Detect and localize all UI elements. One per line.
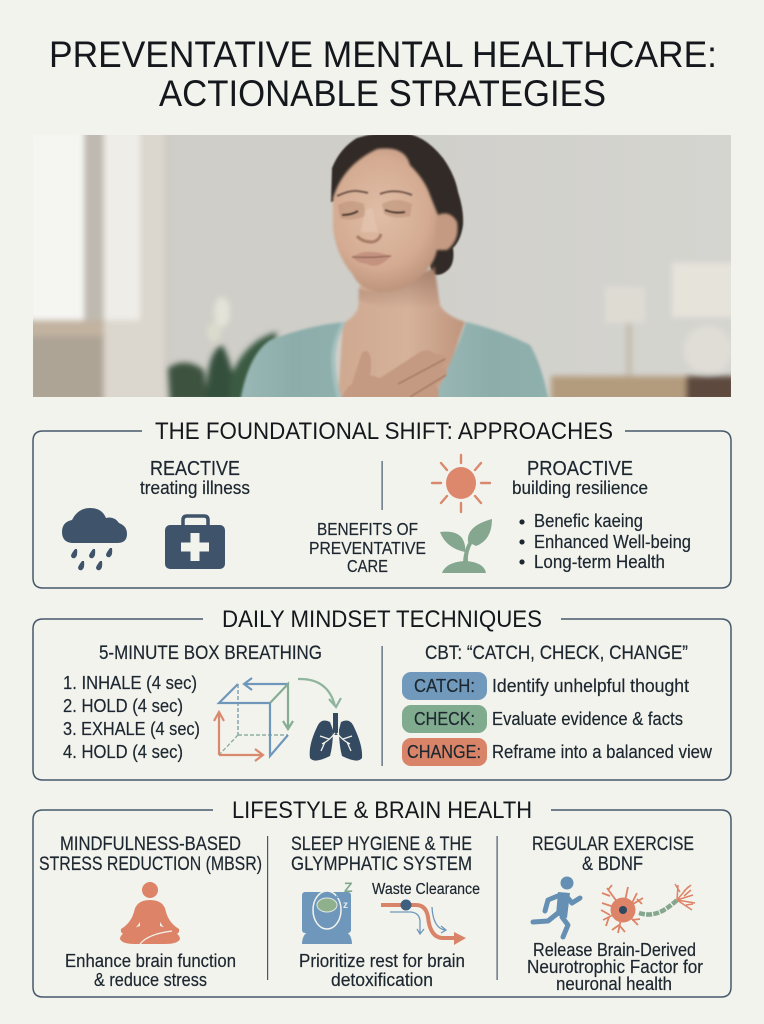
- eyebrows: [337, 191, 412, 196]
- breathing steps: 3. EXHALE (4 sec): [63, 718, 200, 739]
- benefits list: Benefic kaeing: [534, 511, 643, 531]
- heading: MBSR: STRESS REDUCTION (MBSR): [39, 854, 262, 875]
- icon: lungs: [310, 713, 362, 761]
- breathing steps: 1. INHALE (4 sec): [63, 672, 197, 693]
- breathing steps: 2. HOLD (4 sec): [63, 695, 183, 716]
- diagram: waste clearance flow: [381, 900, 466, 945]
- panel: daily mindset techniques: [33, 606, 731, 780]
- icon: sleeping head: [302, 879, 353, 944]
- breathing steps: [63, 672, 200, 762]
- title: ACTIONABLE STRATEGIES: [159, 73, 606, 114]
- MBSR text: Enhance brain function: [65, 951, 236, 971]
- exercise text: [527, 940, 703, 994]
- benefits list: Long-term Health: [534, 552, 665, 572]
- exercise text: Neurotrophic Factor for: [527, 957, 703, 977]
- benefits label: CARE: [347, 556, 388, 576]
- lamps and side table: [551, 263, 736, 402]
- icon: sleeping head: z: [343, 900, 348, 911]
- icon: first aid kit: [165, 516, 225, 569]
- heading: exercise: [532, 834, 694, 875]
- panel: lifestyle and brain health: [33, 797, 731, 997]
- heading: sleep: SLEEP HYGIENE & THE: [291, 834, 472, 855]
- icon: rain cloud: [62, 508, 127, 570]
- icon: sprout: [440, 519, 492, 573]
- face: [332, 146, 440, 292]
- benefits list: [520, 511, 691, 572]
- heading: exercise: REGULAR EXERCISE: [532, 834, 694, 855]
- heading: sleep: GLYMPHATIC SYSTEM: [291, 854, 472, 875]
- CBT step: change: CHANGE:: [407, 741, 481, 762]
- hair: [331, 133, 463, 275]
- benefits label: [309, 519, 426, 576]
- icon: neuron: [601, 884, 695, 933]
- sleep text: [299, 951, 465, 990]
- plant: [168, 297, 277, 402]
- arrow: to lungs: [298, 679, 341, 707]
- benefits list: Enhanced Well-being: [534, 532, 691, 552]
- CBT step: check: CHECK:: [414, 708, 475, 729]
- sleep text: Prioritize rest for brain: [299, 951, 465, 971]
- lips: [352, 252, 391, 266]
- heading: sleep: [291, 834, 472, 875]
- ear: [442, 215, 458, 250]
- divider: [382, 646, 383, 766]
- heading: lifestyle: LIFESTYLE & BRAIN HEALTH: [232, 797, 532, 824]
- benefits label: PREVENTATIVE: [309, 538, 426, 558]
- CBT step: catch: CATCH:: [414, 675, 475, 696]
- chin shadow: [358, 266, 439, 302]
- CBT step: catch: Identify unhelpful thought: [492, 675, 689, 696]
- closed eyes: [342, 210, 405, 215]
- icon: sleeping head: Z: [344, 879, 353, 895]
- MBSR text: & reduce stress: [94, 970, 207, 990]
- icon: runner: [533, 876, 580, 937]
- MBSR text: [65, 951, 236, 990]
- label: waste clearance: Waste Clearance: [372, 881, 480, 898]
- icon: breathing cube: [214, 678, 293, 761]
- heading: foundational shift: THE FOUNDATIONAL SHIFT: APPROACHES: [155, 418, 613, 445]
- reactive heading: [140, 458, 250, 498]
- shirt: [240, 322, 345, 402]
- neck and chest: [338, 270, 465, 400]
- heading: box breathing: 5-MINUTE BOX BREATHING: [99, 643, 322, 664]
- heading: MBSR: MINDFULNESS-BASED: [60, 834, 241, 855]
- eye socket shadow: [338, 200, 412, 220]
- title: [49, 34, 717, 114]
- proactive heading: PROACTIVE: [527, 458, 633, 480]
- exercise text: Release Brain-Derived: [533, 940, 696, 960]
- CBT step: check: [402, 705, 683, 733]
- heading: daily mindset: DAILY MINDSET TECHNIQUES: [222, 606, 542, 633]
- panel: the foundational shift: [33, 418, 731, 588]
- heading: exercise: & BDNF: [582, 854, 643, 875]
- benefits label: BENEFITS OF: [317, 519, 418, 539]
- CBT step: change: Reframe into a balanced view: [492, 741, 713, 762]
- icon: sun: [432, 455, 490, 512]
- woman: [240, 133, 549, 402]
- nose: [357, 234, 381, 242]
- icon: meditating person: [120, 882, 180, 944]
- reactive heading: treating illness: [140, 478, 250, 498]
- hero photo: woman breathing calmly with hand on chest: [28, 130, 736, 402]
- reactive heading: REACTIVE: [150, 458, 240, 480]
- title: PREVENTATIVE MENTAL HEALTHCARE:: [49, 34, 717, 75]
- icon: sleeping head: z: [335, 890, 340, 901]
- CBT step: catch: [402, 672, 689, 700]
- column dividers: [267, 836, 498, 980]
- CBT step: check: Evaluate evidence & facts: [492, 708, 683, 729]
- CBT step: change: [402, 738, 713, 766]
- proactive heading: [512, 458, 648, 498]
- proactive heading: building resilience: [512, 478, 648, 498]
- heading: MBSR: [39, 834, 262, 875]
- exercise text: neuronal health: [556, 974, 672, 994]
- breathing steps: 4. HOLD (4 sec): [63, 741, 183, 762]
- divider: [382, 461, 383, 510]
- hand on chest: [342, 350, 448, 397]
- sleep text: detoxification: [331, 970, 433, 990]
- heading: CBT: CBT: “CATCH, CHECK, CHANGE”: [425, 643, 688, 664]
